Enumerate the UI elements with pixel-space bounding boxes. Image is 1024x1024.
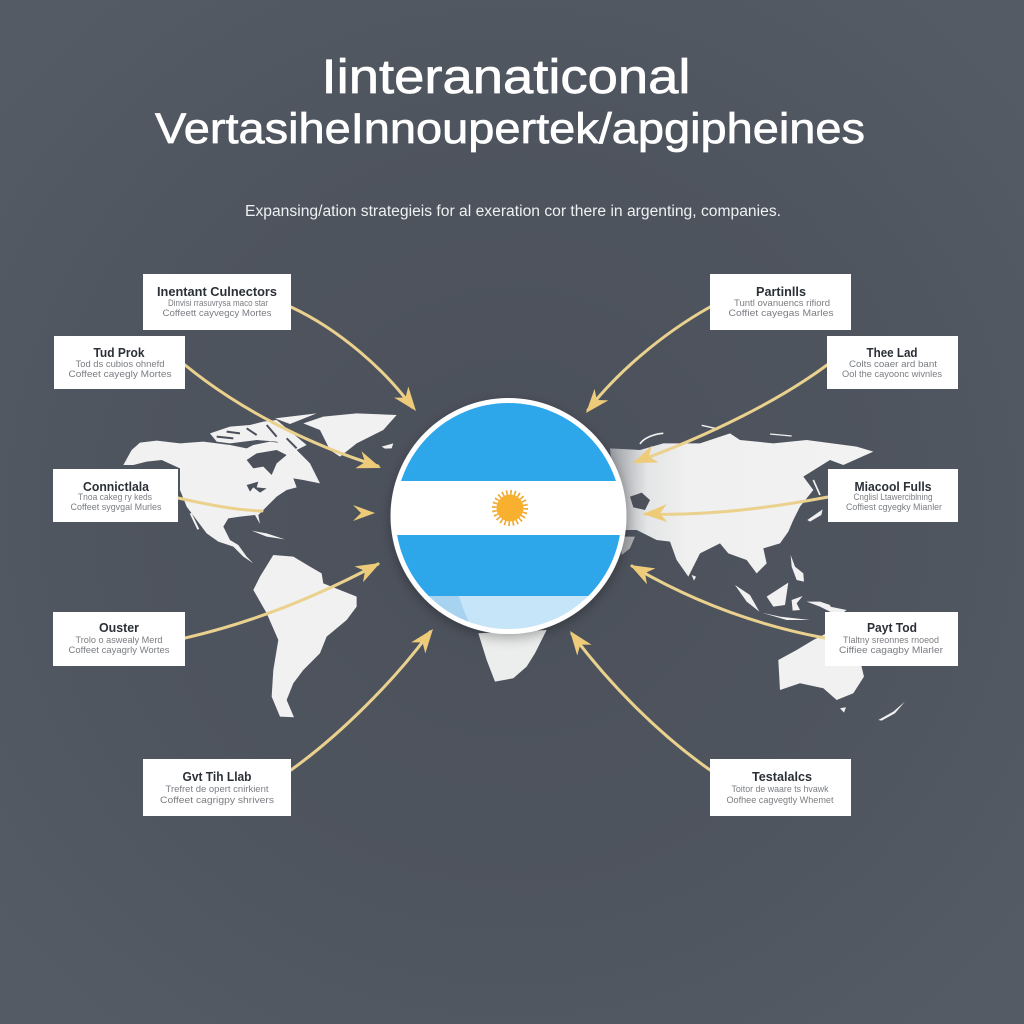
arrow: Miacool Fulls to flag	[643, 497, 828, 523]
Argentina flag globe	[390, 398, 630, 636]
label box: Inentant Culnectors: Coffeett cayvegcy Mortes	[162, 308, 272, 319]
label box: Partinlls: Partinlls	[756, 285, 806, 299]
label box: Payt Tod: Ciffiee cagagby Mlarler	[839, 645, 943, 656]
label box: Partinlls	[710, 274, 851, 330]
label box: Miacool Fulls: Miacool Fulls	[854, 480, 932, 494]
label box: Thee Lad: Thee Lad	[866, 346, 918, 360]
world map: Eurasia and Oceania	[610, 425, 905, 721]
label box: Testalalcs: Testalalcs	[752, 770, 812, 784]
label box: Testalalcs	[710, 759, 851, 816]
label box: Ouster: Ouster	[99, 621, 139, 635]
arrow: Thee Lad to flag	[630, 365, 827, 471]
label box: Gvt Tih Llab: Coffeet cagrigpy shrivers	[160, 795, 274, 806]
label box: Partinlls: Tuntl ovanuencs rifiord	[734, 298, 830, 309]
label box: Inentant Culnectors: Inentant Culnectors	[157, 285, 277, 299]
title	[155, 51, 865, 153]
label box: Inentant Culnectors	[143, 274, 291, 330]
label box: Connictlala: Tnoa cakeg ry keds	[78, 492, 152, 503]
arrow: Tud Prok to flag	[185, 365, 384, 476]
label box: Gvt Tih Llab: Gvt Tih Llab	[182, 770, 252, 784]
label box: Thee Lad: Ool the cayoonc wivnles	[842, 369, 942, 380]
label box: Ouster: Coffeet cayagrly Wortes	[68, 645, 170, 656]
world map: Americas	[123, 413, 397, 717]
title: Iinteranaticonal	[322, 51, 690, 104]
label box: Tud Prok: Coffeet cayegly Mortes	[68, 369, 172, 380]
world map: Africa fragment	[478, 537, 635, 682]
icon: sun	[496, 494, 524, 522]
arrow: Gvt Tih Llab to flag	[291, 623, 440, 770]
label box: Miacool Fulls: Coffiest cgyegky Mianler	[846, 502, 942, 513]
arrow: Ouster to flag	[185, 555, 384, 638]
label box: Tud Prok: Tod ds cubios ohnefd	[76, 359, 164, 370]
label box: Thee Lad	[827, 336, 958, 389]
label box: Thee Lad: Colts coaer ard bant	[849, 359, 937, 370]
label box: Miacool Fulls: Cnglisl Ltawerciblning	[854, 492, 932, 503]
label box: Partinlls: Coffiet cayegas Marles	[728, 308, 834, 319]
arrows	[178, 307, 828, 770]
label box: Miacool Fulls	[828, 469, 958, 522]
arrow: Connictlala to flag	[178, 498, 375, 521]
arrow: Payt Tod to flag	[626, 557, 825, 638]
label box: Payt Tod	[825, 612, 958, 666]
subtitle: Expansing/ation strategieis for al exeration cor there in argenting, companies.	[245, 203, 781, 220]
label box: Ouster	[53, 612, 185, 666]
label box: Connictlala	[53, 469, 178, 522]
label box: Tud Prok	[54, 336, 185, 389]
label box: Gvt Tih Llab	[143, 759, 291, 816]
arrow: Testalalcs to flag	[563, 626, 710, 770]
label box: Testalalcs: Oofhee cagvegtly Whemet	[726, 795, 834, 806]
label box: Connictlala: Coffeet sygvgal Murles	[70, 502, 162, 513]
label box: Connictlala: Connictlala	[83, 480, 150, 494]
label box: Testalalcs: Toitor de waare ts hvawk	[732, 784, 829, 795]
label box: Payt Tod: Payt Tod	[867, 621, 917, 635]
title: VertasiheInnoupertek/apgipheines	[155, 105, 865, 153]
label box: Inentant Culnectors: Dinvisi rrasuvrysa maco star	[168, 298, 268, 309]
arrow: Partinlls to flag	[579, 307, 710, 419]
label box: Payt Tod: Tlaltny sreonnes rnoeod	[843, 635, 939, 646]
label box: Gvt Tih Llab: Trefret de opert cnirkient	[166, 784, 269, 795]
arrow: Inentant Culnectors to flag	[291, 307, 423, 417]
label box: Tud Prok: Tud Prok	[94, 346, 145, 360]
label box: Ouster: Trolo o aswealy Merd	[76, 635, 162, 646]
